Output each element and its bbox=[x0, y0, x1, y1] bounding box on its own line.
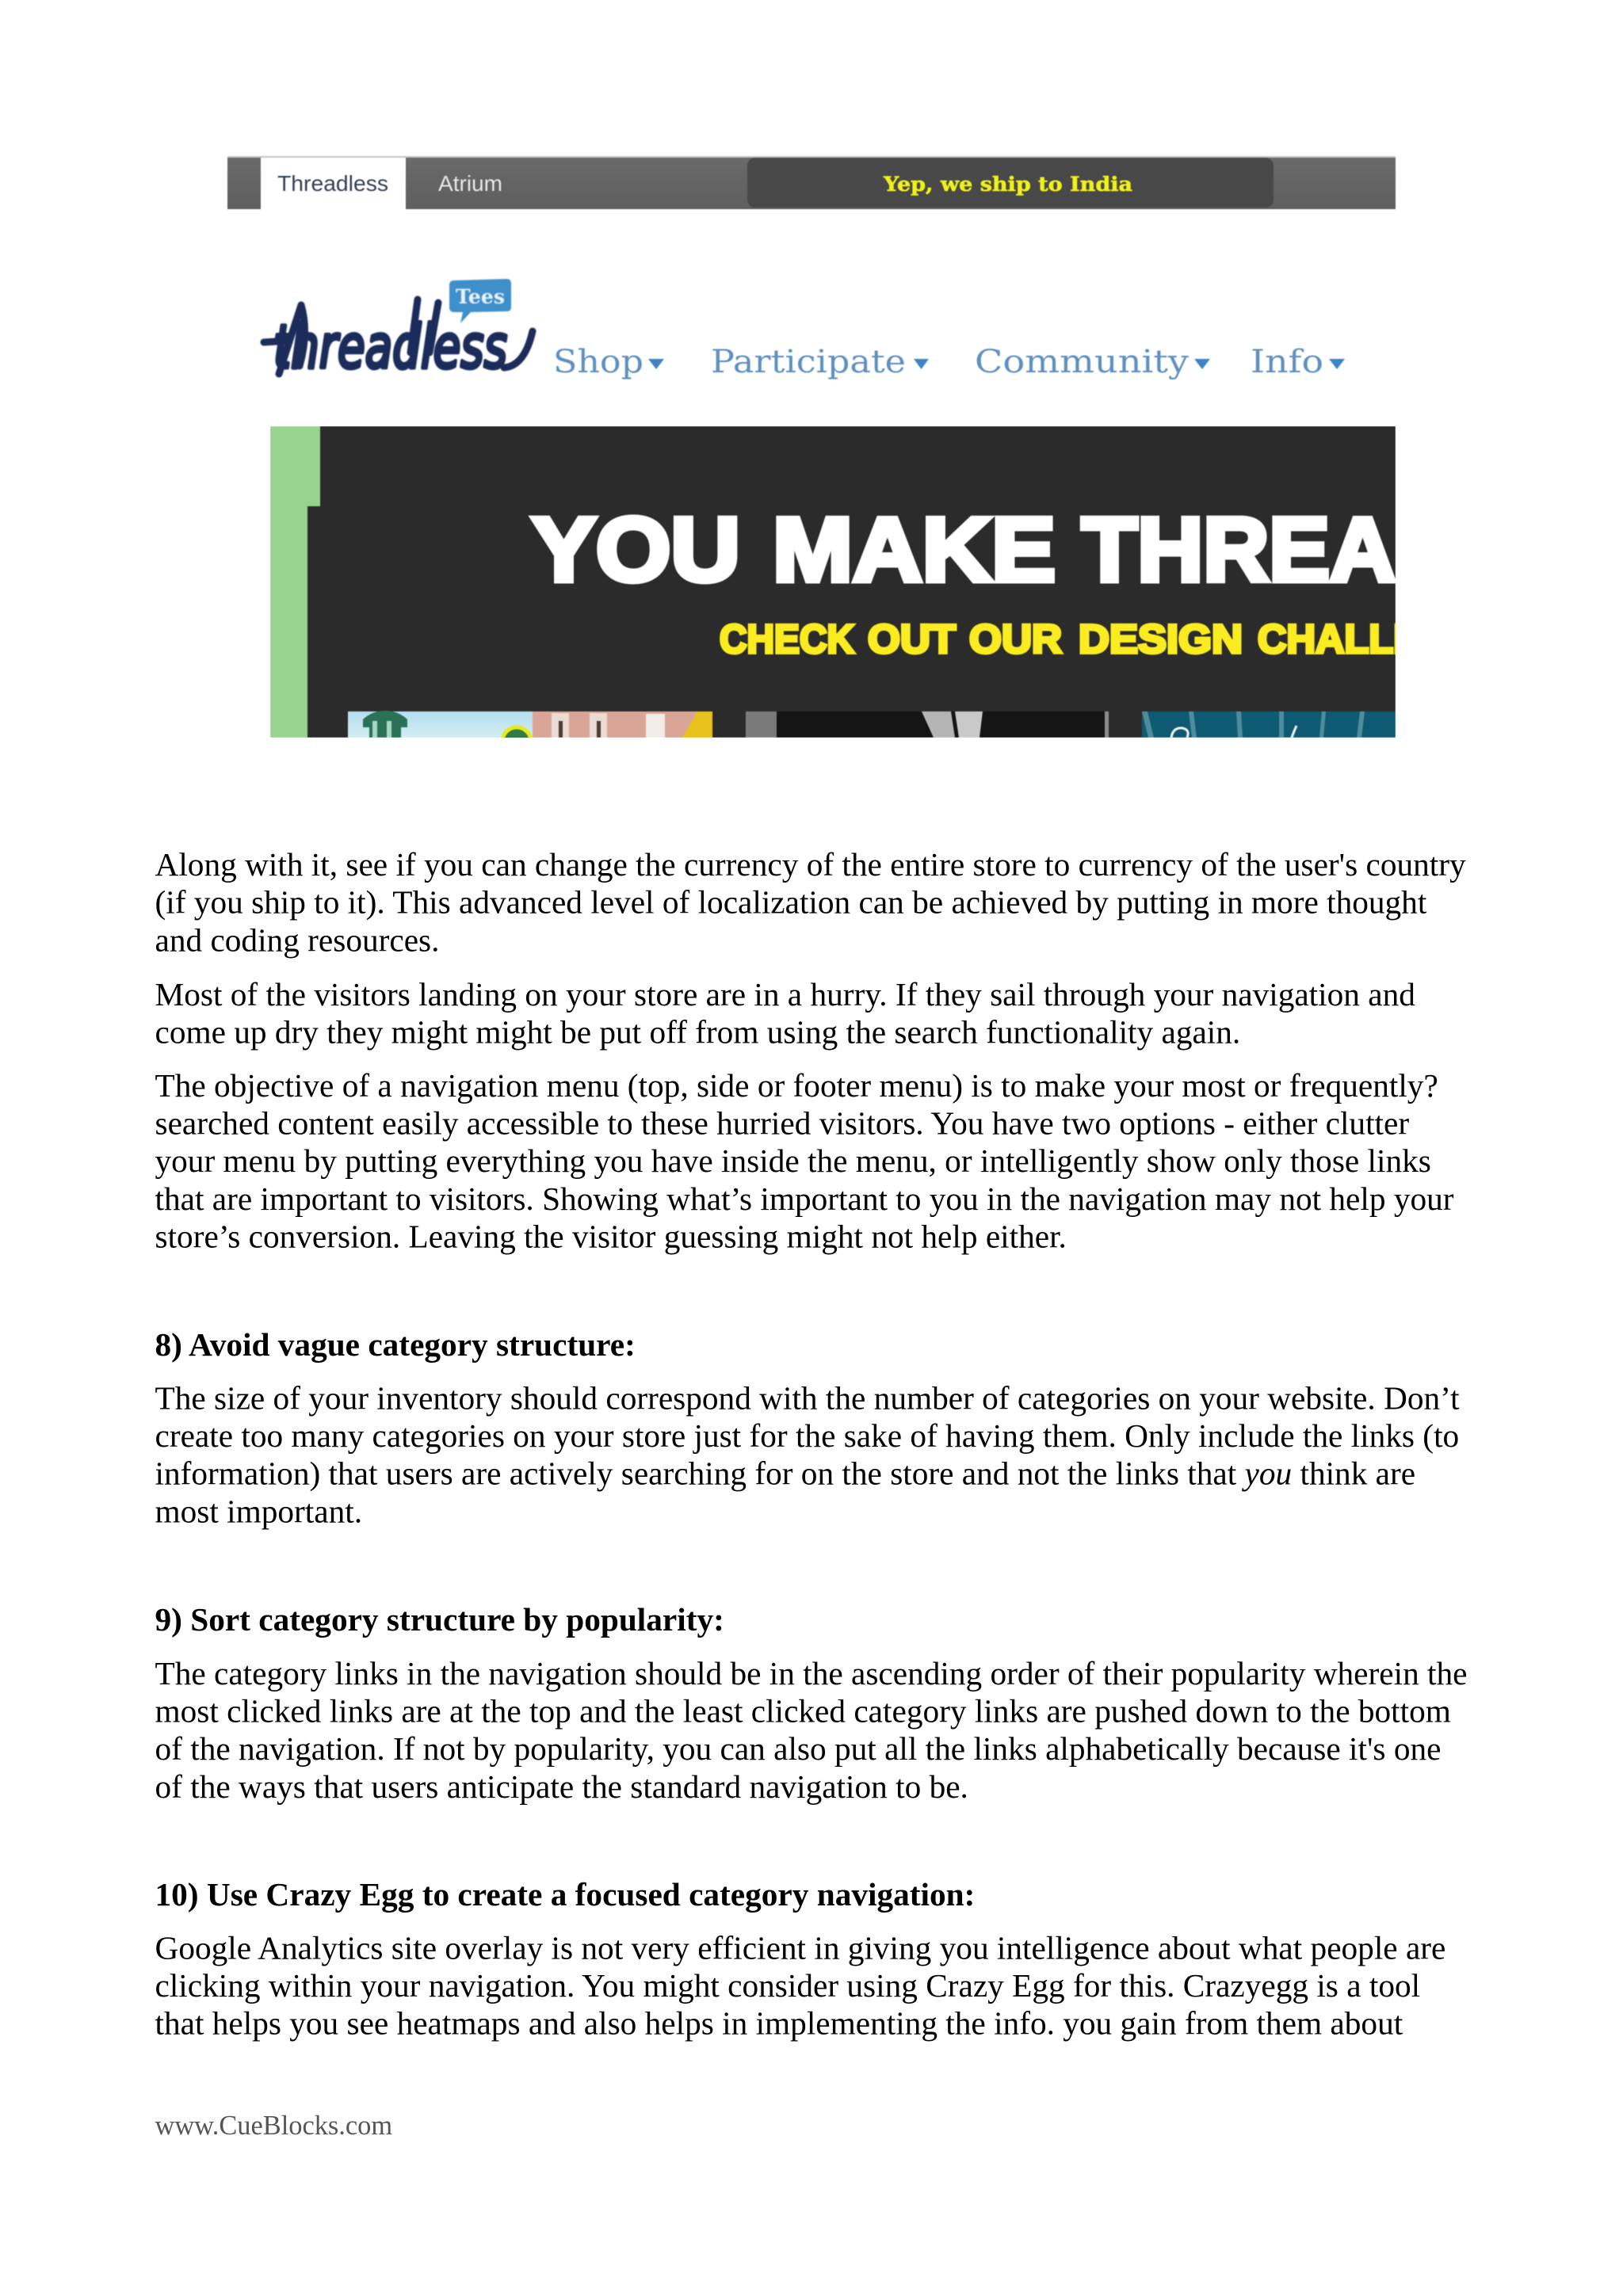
design tile 1: city bbox=[347, 710, 713, 738]
speech bubble: Tees: Tees bbox=[456, 285, 505, 308]
heading: section 8: 8) Avoid vague category structure: bbox=[155, 1326, 636, 1363]
design tile 2: black and white photo bbox=[746, 711, 1109, 738]
paragraph: section 8 body: The size of your inventory should correspond with the number of categories on your website. Don’t bbox=[155, 1380, 1460, 1417]
active tab: Threadless: Threadless bbox=[277, 171, 388, 196]
nav item: Info bbox=[1251, 344, 1345, 380]
active tab: Threadless bbox=[261, 158, 406, 210]
paragraph: section 10 body bbox=[155, 1930, 1445, 2041]
nav item: Community: Community bbox=[975, 344, 1189, 380]
paragraph: objective of a navigation menu: searched content easily accessible to these hurried visitors. You have two options - either clutter bbox=[155, 1105, 1409, 1142]
paragraph: section 9 body: most clicked links are at the top and the least clicked category links are pushed down to the bottom bbox=[155, 1693, 1451, 1730]
banner subheadline: CHECK bbox=[720, 616, 854, 662]
paragraph: objective of a navigation menu bbox=[155, 1067, 1454, 1255]
green side strip bbox=[270, 426, 320, 738]
footer: website: www.CueBlocks.com bbox=[155, 2111, 392, 2141]
paragraph: section 8 body bbox=[155, 1380, 1460, 1529]
paragraph: hurried visitors: come up dry they might might be put off from using the search functionality again. bbox=[155, 1013, 1240, 1050]
paragraph: section 9 body: The category links in the navigation should be in the ascending order of their popularity wherein the bbox=[155, 1655, 1468, 1691]
banner headline bbox=[528, 513, 1396, 585]
paragraph: section 10 body: Google Analytics site overlay is not very efficient in giving you intelligence about what people are bbox=[155, 1930, 1445, 1966]
banner subheadline: OUT bbox=[868, 616, 956, 662]
shipping notice pill bbox=[747, 158, 1274, 208]
paragraph: section 8 body: most important. bbox=[155, 1493, 362, 1529]
paragraph: section 9 body bbox=[155, 1655, 1468, 1805]
banner subheadline: CHALLE bbox=[1258, 616, 1420, 662]
paragraph: currency localization: (if you ship to it). This advanced level of localization can be achieved by putting in more thought bbox=[155, 884, 1427, 921]
script wordmark: threadless bbox=[273, 311, 507, 382]
paragraph: section 8 body: information) that users are actively searching for on the store and not the links that you think are bbox=[155, 1455, 1415, 1493]
paragraph: section 9 body: of the ways that users anticipate the standard navigation to be. bbox=[155, 1768, 968, 1805]
logo: threadless tees bbox=[264, 279, 533, 382]
banner subheadline: OUR bbox=[969, 616, 1062, 662]
paragraph: section 10 body: clicking within your navigation. You might consider using Crazy Egg for this. Crazyegg is a tool bbox=[155, 1967, 1420, 2004]
paragraph: objective of a navigation menu: store’s conversion. Leaving the visitor guessing might not help either. bbox=[155, 1219, 1067, 1255]
nav item: Info: Info bbox=[1251, 344, 1323, 380]
banner subheadline bbox=[719, 622, 1396, 656]
main navigation bbox=[553, 344, 1345, 380]
paragraph: section 10 body: that helps you see heatmaps and also helps in implementing the info. you gain from them about bbox=[155, 2004, 1403, 2041]
paragraph: objective of a navigation menu: your menu by putting everything you have inside the menu, or intelligently show only those links bbox=[155, 1142, 1431, 1179]
paragraph: section 9 body: of the navigation. If not by popularity, you can also put all the links alphabetically because it's one bbox=[155, 1730, 1441, 1767]
hero banner bbox=[270, 426, 1420, 756]
design tile 3: teal lettering bbox=[1142, 711, 1396, 738]
paragraph: objective of a navigation menu: that are important to visitors. Showing what’s important to you in the navigation may not help your bbox=[155, 1180, 1454, 1217]
banner headline: YOU bbox=[532, 500, 740, 601]
banner headline: THREA bbox=[1082, 500, 1396, 601]
paragraph: hurried visitors: Most of the visitors landing on your store are in a hurry. If they sail through your navigation and bbox=[155, 976, 1415, 1013]
paragraph: currency localization: Along with it, see if you can change the currency of the entire store to currency of the user's country bbox=[155, 846, 1466, 883]
banner subheadline: DESIGN bbox=[1079, 616, 1243, 662]
paragraph: objective of a navigation menu: The objective of a navigation menu (top, side or footer menu) is to make your most or frequently? bbox=[155, 1067, 1438, 1104]
tab: Atrium: Atrium bbox=[438, 171, 502, 196]
shipping notice pill: Yep, we ship to India bbox=[883, 173, 1132, 196]
paragraph: currency localization: and coding resources. bbox=[155, 921, 439, 958]
speech bubble: Tees bbox=[449, 279, 511, 323]
paragraph: section 8 body: create too many categories on your store just for the sake of having them. Only include the links (to bbox=[155, 1417, 1459, 1455]
nav item: Participate: Participate bbox=[711, 344, 906, 380]
banner headline: MAKE bbox=[773, 500, 1056, 601]
paragraph: currency localization bbox=[155, 846, 1466, 958]
nav item: Shop: Shop bbox=[553, 344, 643, 380]
paragraph: hurried visitors bbox=[155, 976, 1415, 1050]
screenshot: top utility bar bbox=[227, 156, 1396, 210]
heading: section 9: 9) Sort category structure by popularity: bbox=[155, 1601, 724, 1638]
heading: section 10: 10) Use Crazy Egg to create a focused category navigation: bbox=[155, 1876, 975, 1913]
